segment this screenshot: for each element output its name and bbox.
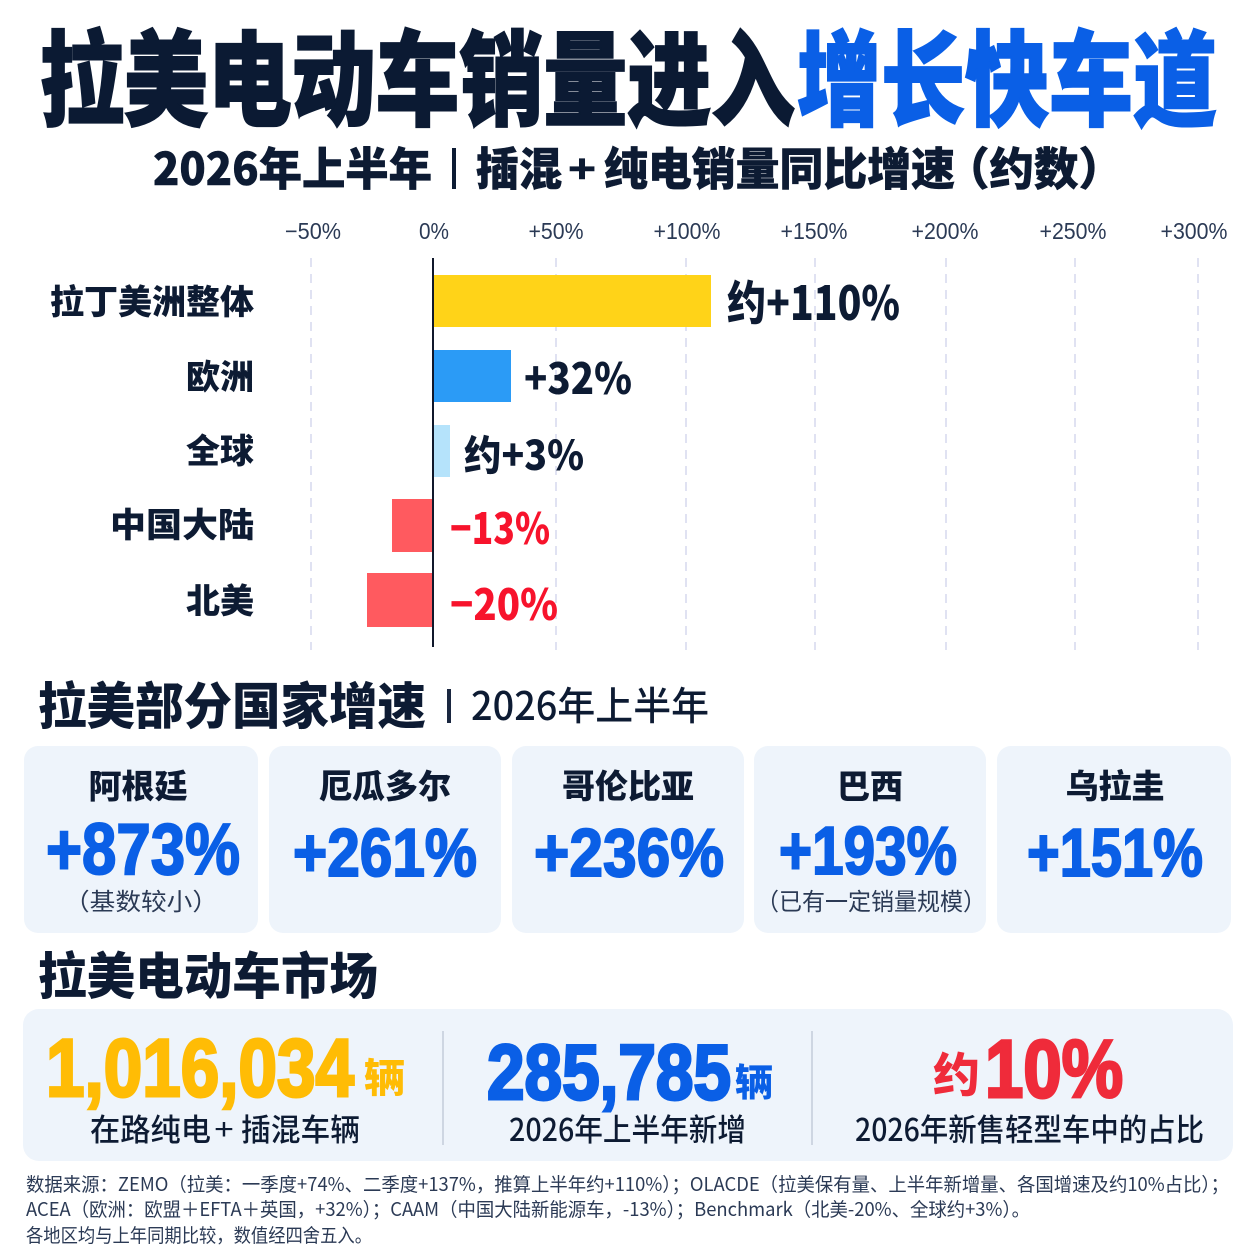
bar values: +32% (524, 345, 632, 407)
stat: share: 10% (985, 1024, 1123, 1115)
panel: market stats (23, 1009, 1233, 1161)
bar values: 约+110% (727, 265, 900, 334)
panel: 厄瓜多尔: +261% (293, 815, 477, 891)
bars (367, 275, 711, 627)
subtitle: 纯电销量同比增速 (604, 133, 955, 198)
bar values: −20% (450, 571, 558, 633)
panel: 厄瓜多尔 (269, 746, 501, 933)
subtitle: + (568, 147, 596, 191)
panel: 哥伦比亚: +236% (534, 815, 724, 891)
panel: 阿根廷 (24, 746, 258, 933)
panel: 乌拉圭 (997, 746, 1231, 933)
axis labels: 0% (419, 218, 449, 244)
stat: share: 约 (933, 1037, 980, 1106)
row labels: 欧洲 (186, 350, 254, 399)
subtitle (153, 133, 1123, 198)
panel: 巴西: （已有一定销量规模） (756, 882, 986, 917)
section heading: countries: 2026年上半年 (471, 676, 709, 732)
bar values (450, 265, 900, 633)
source notes: 各地区均与上年同期比较，数值经四舍五入。 (26, 1221, 372, 1248)
stat: on road: + (214, 1113, 234, 1146)
zero line (432, 258, 434, 647)
panel: 厄瓜多尔: 厄瓜多尔 (319, 760, 451, 808)
section heading: countries: 拉美部分国家增速 (38, 667, 426, 739)
row labels: 拉丁美洲整体 (50, 275, 254, 324)
axis labels: +150% (780, 218, 848, 244)
stat: share: 2026年新售轻型车中的占比 (855, 1105, 1204, 1150)
axis labels: +100% (654, 218, 720, 244)
section heading: countries (38, 667, 709, 739)
panel: 阿根廷: 阿根廷 (88, 760, 188, 808)
subtitle: 2026年上半年 (153, 133, 432, 198)
subtitle: （约数） (945, 133, 1123, 198)
panel: 巴西: +193% (779, 813, 957, 889)
axis labels (285, 218, 1228, 244)
stat: new: 辆 (735, 1052, 773, 1107)
axis labels: +200% (912, 218, 978, 244)
source notes: 数据来源：ZEMO（拉美：一季度+74%、二季度+137%，推算上半年约+110%）；OLACDE（拉美保有量、上半年新增量、各国增速及约10%占比）； (26, 1170, 1229, 1197)
stat: on road: 在路纯电 (90, 1105, 211, 1150)
axis labels: +300% (1160, 218, 1228, 244)
source notes (26, 1170, 1229, 1248)
panel: 哥伦比亚 (512, 746, 744, 933)
axis labels: −50% (285, 218, 341, 244)
bar chart (50, 218, 1228, 650)
axis labels: +50% (528, 218, 584, 244)
section heading: market: 拉美电动车市场 (38, 937, 378, 1009)
stat: on road: 辆 (364, 1046, 405, 1104)
panel: 阿根廷: （基数较小） (64, 882, 218, 917)
bar values: −13% (450, 495, 550, 557)
stat: on road: 1,016,034 (46, 1023, 354, 1114)
stat: new: 2026年上半年新增 (509, 1105, 746, 1150)
title: 拉美电动车销量进入 (40, 0, 795, 147)
source notes: ACEA（欧洲：欧盟＋EFTA＋英国，+32%）；CAAM（中国大陆新能源车，-13%）；Benchmark（北美-20%、全球约+3%）。 (26, 1195, 1030, 1222)
panel: 乌拉圭: 乌拉圭 (1066, 760, 1164, 808)
stat: share (855, 1024, 1204, 1150)
panel: 巴西: 巴西 (837, 760, 903, 808)
panel: 乌拉圭: +151% (1027, 815, 1203, 891)
row labels (50, 275, 254, 623)
row labels: 全球 (186, 424, 254, 473)
axis grid lines (311, 258, 1198, 650)
stat: new: 285,785 (487, 1028, 731, 1116)
subtitle: 插混 (476, 133, 562, 198)
bar values: 约+3% (464, 422, 584, 482)
stat: on road: 插混车辆 (241, 1105, 360, 1150)
panel: 哥伦比亚: 哥伦比亚 (562, 760, 694, 808)
axis labels: +250% (1040, 218, 1106, 244)
panel: 巴西 (754, 746, 986, 933)
row labels: 北美 (186, 574, 254, 623)
row labels: 中国大陆 (110, 498, 254, 547)
panel: 阿根廷: +873% (46, 810, 240, 890)
